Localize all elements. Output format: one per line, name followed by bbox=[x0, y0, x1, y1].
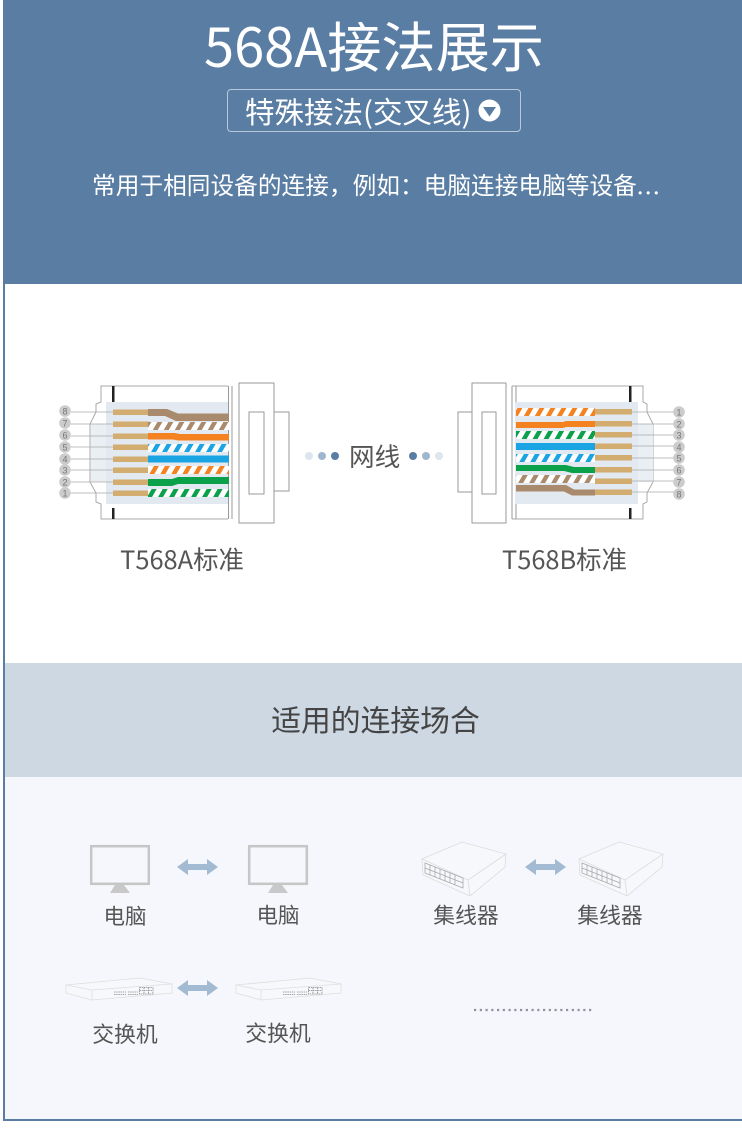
label: hub left: 集线器 bbox=[433, 899, 499, 930]
icon: switch right bbox=[236, 978, 341, 1000]
pins 1-8: 5 bbox=[62, 442, 68, 452]
cable dots: left bbox=[305, 452, 339, 460]
pins 1-8: 4 bbox=[62, 454, 68, 464]
pins 1-8: 2 bbox=[676, 420, 682, 430]
panel: header bbox=[3, 0, 742, 284]
icon: monitor right bbox=[249, 846, 307, 893]
section heading: 适用的连接场合 bbox=[271, 696, 480, 740]
connector diagrams bbox=[59, 382, 685, 524]
pins 1-8: 6 bbox=[62, 430, 68, 440]
pins 1-8 bbox=[59, 405, 113, 499]
subtitle text: 特殊接法(交叉线) bbox=[245, 90, 471, 132]
label: computer left: 电脑 bbox=[103, 900, 146, 931]
pins 1-8: 3 bbox=[676, 430, 682, 440]
pins 1-8: 3 bbox=[62, 466, 68, 476]
pins 1-8: 5 bbox=[676, 454, 682, 464]
gold contacts bbox=[113, 410, 149, 496]
arrow: switches bbox=[177, 980, 218, 996]
cable label: 网线 bbox=[349, 436, 400, 474]
gold contacts bbox=[595, 409, 632, 495]
pins 1-8: 7 bbox=[676, 478, 682, 488]
cable dots: right bbox=[409, 452, 443, 460]
label: switch right: 交换机 bbox=[245, 1017, 311, 1048]
pins 1-8: 4 bbox=[676, 442, 682, 452]
arrow: hubs bbox=[525, 859, 566, 875]
label: T568B: T568B标准 bbox=[502, 541, 627, 577]
pins 1-8: 6 bbox=[676, 466, 682, 476]
icon: monitor left bbox=[91, 846, 149, 893]
pins 1-8: 8 bbox=[676, 490, 682, 500]
label: T568A: T568A标准 bbox=[120, 541, 244, 577]
subtitle pill bbox=[227, 89, 521, 132]
arrow: computers bbox=[177, 859, 218, 875]
pins 1-8: 8 bbox=[62, 406, 68, 416]
label: computer right: 电脑 bbox=[256, 899, 300, 930]
pins 1-8: 1 bbox=[62, 488, 68, 498]
pins 1-8: 7 bbox=[62, 418, 68, 428]
icon: dropdown triangle bbox=[478, 100, 500, 122]
panel: use cases bbox=[5, 777, 742, 1119]
wires bbox=[148, 409, 229, 497]
label: switch left: 交换机 bbox=[92, 1018, 158, 1049]
pins 1-8 bbox=[632, 406, 685, 500]
icon: switch left bbox=[66, 978, 172, 1000]
title: 568A接法展示 bbox=[204, 4, 544, 82]
label: hub right: 集线器 bbox=[577, 899, 643, 930]
pins 1-8: 1 bbox=[676, 408, 682, 418]
icon: hub left bbox=[422, 842, 506, 896]
connector: T568B bbox=[458, 383, 685, 523]
icon: hub right bbox=[579, 842, 663, 896]
panel: heading band bbox=[5, 663, 742, 777]
pins 1-8: 2 bbox=[62, 478, 68, 488]
description: 常用于相同设备的连接，例如：电脑连接电脑等设备... bbox=[92, 167, 661, 201]
connector: T568A bbox=[59, 383, 289, 523]
use case icons bbox=[66, 842, 664, 1012]
wires bbox=[516, 408, 595, 496]
ellipsis dots bbox=[474, 1009, 591, 1011]
